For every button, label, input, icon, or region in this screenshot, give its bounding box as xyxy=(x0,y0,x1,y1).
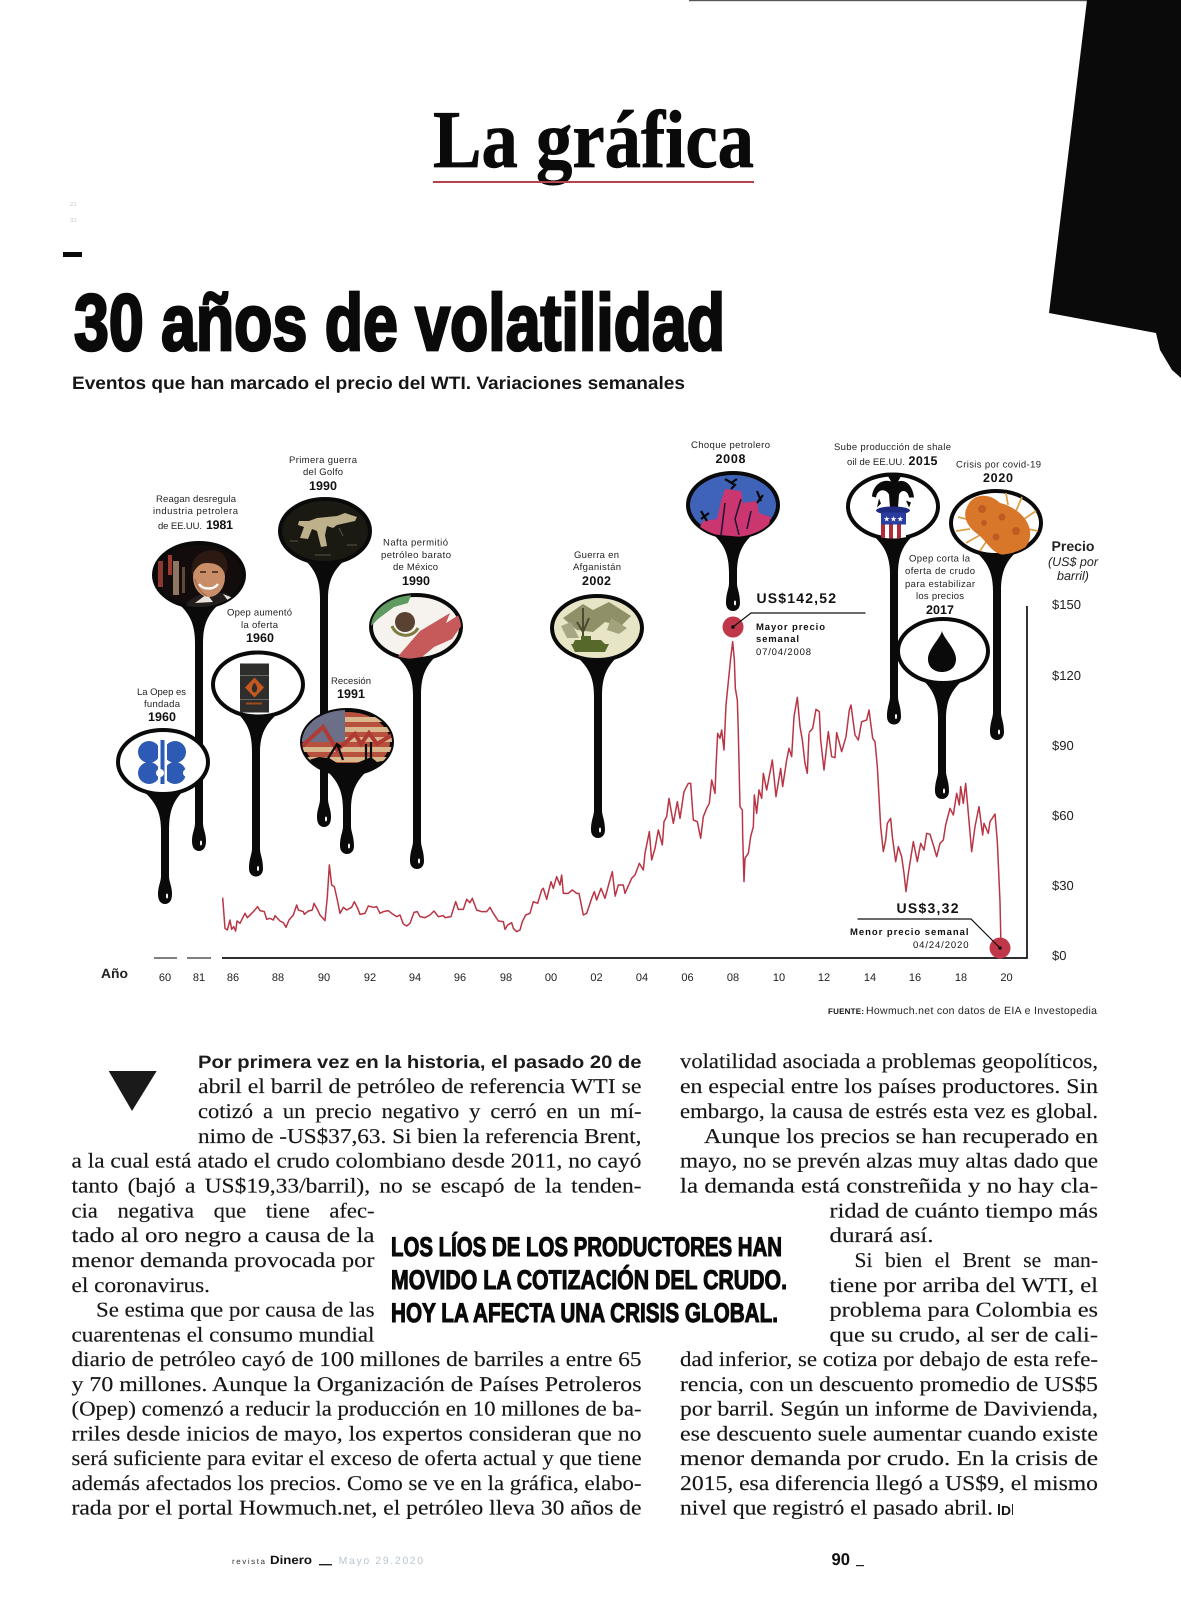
label: Covid: 2020 xyxy=(983,471,1013,485)
event labels xyxy=(137,440,1041,724)
article text: left column: Por primera vez en la historia, el pasado 20 de xyxy=(198,1052,642,1072)
callout: highest price: 07/04/2008 xyxy=(756,647,811,658)
pull quote: MOVIDO LA COTIZACIÓN DEL CRUDO. xyxy=(391,1265,787,1295)
article text: left column: Se estima que por causa de las xyxy=(96,1298,374,1322)
article text: left column: diario de petróleo cayó de 100 millones de barriles a entre 65 xyxy=(72,1347,642,1371)
y axis price labels: $0 xyxy=(1052,948,1066,963)
article text: left column: abril el barril de petróleo de referencia WTI se xyxy=(198,1074,642,1098)
article text: right column: nivel que registró el pasado abril. xyxy=(680,1496,993,1520)
callout: highest price: US$142,52 xyxy=(756,590,836,606)
label: Reagan xyxy=(153,494,239,532)
x axis year labels: 88 xyxy=(272,972,284,984)
pin: La Opep es fundada 1960 xyxy=(118,730,208,904)
page footer: Mayo 29.2020 xyxy=(339,1555,423,1567)
article text: right column: volatilidad asociada a problemas geopolíticos, xyxy=(680,1049,1098,1073)
article text: right column: que su crudo, al ser de cali- xyxy=(830,1322,1098,1346)
article text: left column: tado al oro negro a causa de la xyxy=(72,1223,375,1247)
main heading: 30 años de volatilidad xyxy=(74,278,725,367)
callout: lowest price: 04/24/2020 xyxy=(913,940,968,951)
article text: right column: ese descuento suele aumentar cuando existe xyxy=(680,1421,1098,1445)
x axis year labels: 18 xyxy=(955,972,967,984)
article text: left column: cotizó a un precio negativo y cerró en un mí- xyxy=(198,1099,642,1123)
label: La Opep es fundada xyxy=(137,687,186,724)
x axis year labels: 00 xyxy=(545,972,557,984)
page footer: Dinero xyxy=(270,1553,312,1567)
label: Shale: 2015 xyxy=(908,454,938,468)
label: Afganistán: Afganistán xyxy=(573,562,621,573)
label: Shale: Sube producción de shale xyxy=(834,442,951,453)
callout: highest price: Mayor precio xyxy=(756,622,825,633)
label: Choque petrolero: 2008 xyxy=(716,452,746,466)
label: Covid: Crisis por covid-19 xyxy=(956,460,1041,470)
article text: right column: durará así. xyxy=(830,1223,934,1247)
label: Primera guerra del Golfo: Primera guerra xyxy=(289,455,358,466)
scanned page edge: black shape top right xyxy=(689,0,1181,378)
label: La Opep es fundada: La Opep es xyxy=(137,687,186,698)
label: La Opep es fundada: 1960 xyxy=(148,710,176,724)
chart axes xyxy=(154,606,1027,958)
x axis year labels xyxy=(101,966,1013,984)
pin: Primera guerra del Golfo 1990 xyxy=(280,499,370,827)
callout: lowest price: US$3,32 xyxy=(896,900,959,916)
label: Reagan: 1981 xyxy=(206,518,233,532)
article text: left column: y 70 millones. Aunque la Organización de Países Petroleros xyxy=(72,1372,642,1396)
article text: right column: dad inferior, se cotiza por debajo de esta refe- xyxy=(680,1347,1098,1371)
label: Opep aumentó xyxy=(227,608,292,645)
label: Reagan: Reagan desregula xyxy=(156,494,237,505)
label: Afganistán: Guerra en xyxy=(574,550,619,561)
label: Opep corta: Opep corta la xyxy=(909,554,971,565)
article text: right column xyxy=(680,1049,1099,1520)
label: Opep corta: oferta de crudo xyxy=(905,566,975,577)
y axis price labels: $120 xyxy=(1052,668,1081,683)
page footer xyxy=(232,1550,864,1569)
y axis price labels: $60 xyxy=(1052,808,1074,823)
page footer: revista xyxy=(232,1557,266,1566)
article text: right column: en especial entre los países productores. Sin xyxy=(680,1074,1099,1098)
article text: left column: tanto (bajó a US$19,33/barril), no se escapó de la tenden- xyxy=(72,1174,642,1198)
y axis price labels: (US$ por xyxy=(1048,555,1099,569)
label: Shale xyxy=(834,442,951,468)
article text: right column: embargo, la causa de estrés esta vez es global. xyxy=(680,1099,1098,1123)
label: Opep aumentó: la oferta xyxy=(241,620,279,631)
label: Reagan: de EE.UU. xyxy=(158,521,202,532)
label: Choque petrolero: Choque petrolero xyxy=(691,440,770,451)
faint page marks: 31 xyxy=(70,217,77,224)
x axis year labels: 60 xyxy=(159,972,171,984)
label: Primera guerra del Golfo: del Golfo xyxy=(303,467,343,478)
label: Opep corta: para estabilizar xyxy=(905,579,975,590)
label: Nafta: Nafta permitió xyxy=(383,538,448,549)
label: Afganistán: 2002 xyxy=(582,574,611,588)
faint page marks: 21 xyxy=(70,201,77,208)
pin: Crisis por covid-19 2020 xyxy=(951,491,1041,740)
label: Nafta: de México xyxy=(393,562,438,573)
article text: left column: nimo de -US$37,63. Si bien la referencia Brent, xyxy=(198,1124,642,1148)
article text: right column: mayo, no se prevén alzas muy altas dado que xyxy=(680,1148,1098,1172)
pin: Guerra en Afganistán 2002 xyxy=(552,596,642,838)
article text: left column xyxy=(72,1052,642,1520)
pull quote: HOY LA AFECTA UNA CRISIS GLOBAL. xyxy=(391,1298,778,1328)
x axis year labels: 08 xyxy=(727,972,739,984)
label: Primera guerra del Golfo xyxy=(289,455,358,493)
x axis year labels: 86 xyxy=(227,972,239,984)
pin: Opep corta la oferta 2017 xyxy=(898,619,988,799)
label: Reagan: industria petrolera xyxy=(153,506,239,517)
pin: Reagan 1981 xyxy=(154,543,244,851)
label: Afganistán xyxy=(573,550,621,588)
label: Opep corta: los precios xyxy=(916,591,964,602)
article text: left column: (Opep) comenzó a reducir la producción en 10 millones de ba- xyxy=(72,1397,642,1421)
article text: left column: cia negativa que tiene afec- xyxy=(72,1198,375,1222)
pin: Recesión 1991 xyxy=(302,710,392,854)
article text: left column: el coronavirus. xyxy=(72,1273,210,1297)
article text: left column: menor demanda provocada por xyxy=(72,1248,374,1272)
callout: highest price: semanal xyxy=(756,634,799,645)
pin: Sube producción de shale oil 2015 xyxy=(848,474,938,724)
article text: left column: cuarentenas el consumo mundial xyxy=(72,1322,375,1346)
label: Choque petrolero xyxy=(691,440,770,466)
y axis price labels: Precio xyxy=(1052,538,1094,554)
x axis year labels: 12 xyxy=(818,972,830,984)
x axis year labels: 90 xyxy=(318,972,330,984)
source note: FUENTE: xyxy=(828,1007,864,1016)
label: La Opep es fundada: fundada xyxy=(144,699,181,710)
x axis year labels: 81 xyxy=(193,972,205,984)
x axis year labels: 06 xyxy=(681,972,694,984)
x axis year labels: 02 xyxy=(590,972,603,984)
article text: left column: a la cual está atado el crudo colombiano desde 2011, no cayó xyxy=(72,1148,642,1172)
article text: right column: por barril. Según un informe de Davivienda, xyxy=(680,1397,1098,1421)
article text: right column: menor demanda por crudo. En la crisis de xyxy=(680,1446,1098,1470)
article text: right column: ridad de cuánto tiempo más xyxy=(830,1198,1098,1222)
callout: highest price xyxy=(722,590,866,658)
label: Opep aumentó: Opep aumentó xyxy=(227,608,292,619)
icon: lead triangle xyxy=(109,1071,157,1111)
label: Opep corta xyxy=(905,554,975,617)
x axis year labels: 10 xyxy=(773,972,785,984)
article text: right column: la demanda está constreñida y no hay cla- xyxy=(680,1174,1098,1198)
subtitle: Eventos que han marcado el precio del WTI. Variaciones semanales xyxy=(72,373,685,393)
article text: left column: será suficiente para evitar el exceso de oferta actual y que tiene xyxy=(72,1446,642,1470)
article text: right column: problema para Colombia es xyxy=(830,1298,1098,1322)
label: Shale: oil de EE.UU. xyxy=(847,457,905,468)
label: Opep corta: 2017 xyxy=(926,603,954,617)
x axis year labels: 04 xyxy=(636,972,648,984)
label: Recesión: Recesión xyxy=(331,676,371,687)
article text: left column: además afectados los precios. Como se ve en la gráfica, elabo- xyxy=(72,1471,642,1495)
x axis year labels: 20 xyxy=(1000,972,1013,984)
article text: right column: rencia, con un descuento promedio de US$5 xyxy=(680,1372,1098,1396)
y axis price labels: $30 xyxy=(1052,878,1074,893)
y axis price labels: $90 xyxy=(1052,738,1074,753)
label: Opep aumentó: 1960 xyxy=(246,631,274,645)
callout: lowest price xyxy=(850,900,1010,958)
article text: right column: Si bien el Brent se man- xyxy=(854,1248,1098,1272)
faint page marks xyxy=(70,201,77,224)
section title: La gráfica: La gráfica xyxy=(433,94,754,186)
x axis year labels: 92 xyxy=(364,972,376,984)
article text: right column: 2015, esa diferencia llegó a US$9, el mismo xyxy=(680,1471,1098,1495)
y axis price labels: barril) xyxy=(1057,569,1089,583)
x axis year labels: 14 xyxy=(864,972,876,984)
article text: right column: Aunque los precios se han recuperado en xyxy=(704,1124,1099,1148)
y axis price labels xyxy=(1048,538,1099,963)
article text: left column: rada por el portal Howmuch.net, el petróleo lleva 30 años de xyxy=(72,1496,642,1520)
x axis year labels: Año xyxy=(101,966,128,981)
article text: right column: tiene por arriba del WTI, el xyxy=(830,1273,1098,1297)
pull quote xyxy=(391,1232,787,1328)
label: Nafta: 1990 xyxy=(402,574,430,588)
label: Nafta: petróleo barato xyxy=(381,550,451,561)
article text: left column: rriles desde inicios de mayo, los expertos consideran que no xyxy=(72,1421,642,1445)
label: Nafta xyxy=(381,538,451,588)
small black bar xyxy=(63,252,82,257)
x axis year labels: 16 xyxy=(909,972,921,984)
source note: Howmuch.net con datos de EIA e Investopedia xyxy=(866,1005,1097,1017)
pin: Nafta 1990 xyxy=(370,593,462,869)
label: Recesión: 1991 xyxy=(337,687,365,701)
pin: Choque petrolero 2008 xyxy=(688,473,778,611)
callout: lowest price: Menor precio semanal xyxy=(850,927,968,938)
label: Covid xyxy=(956,460,1041,485)
pin: Sube producción de shale oil 2015: ★★★ xyxy=(883,514,904,524)
page footer: 90 xyxy=(832,1550,850,1569)
pull quote: LOS LÍOS DE LOS PRODUCTORES HAN xyxy=(391,1232,782,1262)
icon: end mark D xyxy=(998,1503,1013,1518)
y axis price labels: $150 xyxy=(1052,597,1081,612)
x axis year labels: 96 xyxy=(454,972,466,984)
x axis year labels: 94 xyxy=(409,972,421,984)
price line chart xyxy=(223,642,1001,947)
x axis year labels: 98 xyxy=(500,972,512,984)
label: Recesión xyxy=(331,676,371,701)
label: Primera guerra del Golfo: 1990 xyxy=(309,479,337,493)
icon: end mark D: D xyxy=(1001,1503,1011,1518)
pin: Opep aumentó la oferta 1960 xyxy=(213,652,303,876)
